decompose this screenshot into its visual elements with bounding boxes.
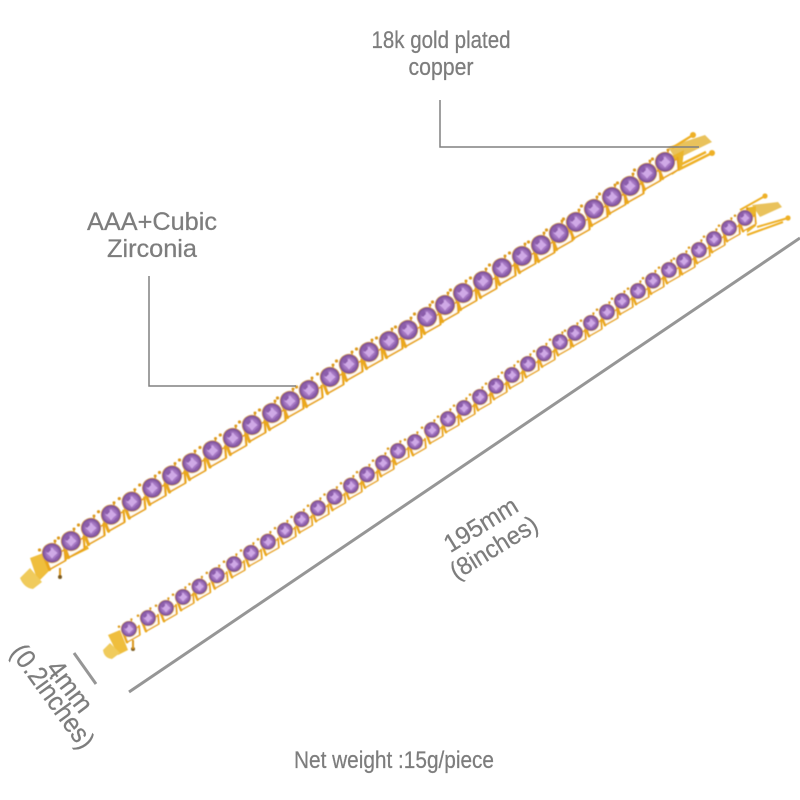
label: 18k gold plated copper [372, 27, 510, 81]
label: length 195mm (8inches): (8inches) [445, 510, 543, 586]
callout line: cubic zirconia [149, 276, 296, 386]
label: length 195mm (8inches): 195mm [439, 492, 523, 558]
clasp: upper bracelet left end [20, 547, 88, 589]
label: 18k gold plated copper: copper [408, 54, 474, 81]
dimension line: width [74, 653, 96, 684]
bracelet: lower with smaller stones [103, 193, 791, 659]
label: AAA+Cubic Zirconia [87, 208, 217, 263]
clasp: upper bracelet right end [668, 132, 715, 175]
bracelet: upper with larger stones [20, 132, 715, 589]
clasp: lower bracelet right end [740, 193, 791, 235]
dimension line: length [129, 238, 800, 692]
label: width 4mm (0.2inches): (0.2inches) [5, 638, 101, 755]
label: width 4mm (0.2inches): 4mm [40, 654, 99, 719]
clasp: lower bracelet left end [103, 630, 135, 659]
callout line: gold plated copper [440, 100, 699, 147]
label: net weight: Net weight :15g/piece [294, 747, 494, 774]
label: AAA+Cubic Zirconia: AAA+Cubic [87, 208, 217, 236]
label: AAA+Cubic Zirconia: Zirconia [107, 235, 197, 263]
stones: lower bracelet row [118, 207, 756, 642]
stones: upper bracelet row [38, 148, 678, 570]
label: 18k gold plated copper: 18k gold plated [372, 27, 510, 54]
